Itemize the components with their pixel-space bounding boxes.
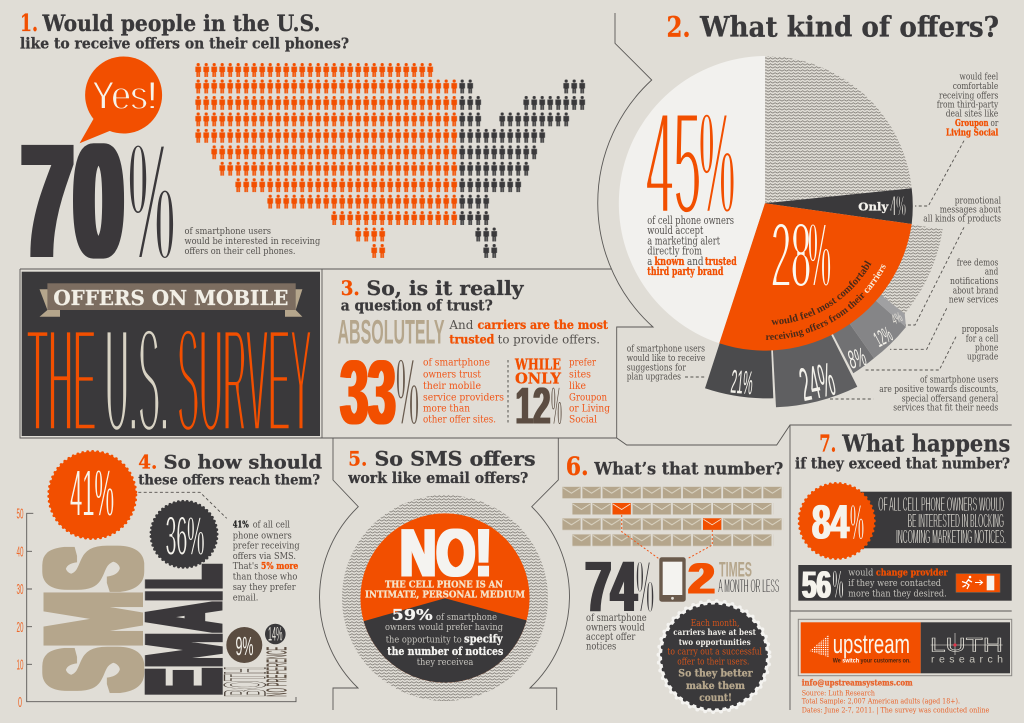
panel: section 1 heading: Would people in the U.S. — [42, 11, 320, 37]
text: 70 percent description — [184, 226, 320, 257]
text: proposals label — [962, 324, 999, 363]
text: section 4 description: phone owners — [233, 530, 292, 541]
stat: while only 12 percent: 12 — [516, 377, 550, 435]
text: 45 percent description: would accept — [647, 224, 704, 237]
text: A MONTH OR LESS — [718, 576, 779, 597]
heading: section 6: What’s that number? — [593, 459, 783, 479]
text: discounts label: of smartphone users — [920, 375, 998, 386]
text: promotional messages label — [923, 195, 1001, 225]
heading: section 2: 2. — [666, 11, 690, 44]
pie wedge: 8 percent — [765, 203, 874, 373]
badge: 84 percent: 84 — [812, 495, 849, 549]
text: absolutely statement: to provide offers. — [498, 332, 600, 346]
badge: 9 percent: 9% — [236, 631, 254, 661]
banner title: THE — [27, 295, 96, 464]
text: plan upgrades label: would like to receive — [627, 353, 706, 364]
text: 12 percent description: Social — [569, 413, 598, 425]
text: proposals label: proposals — [962, 324, 998, 335]
panel: 84 percent bar — [799, 484, 1012, 558]
badge: 41 percent — [49, 452, 136, 538]
stat: 2 times a month or less: 2 — [688, 554, 714, 603]
stat: 56 percent: 56 — [802, 565, 831, 607]
text: 12 percent description: sites — [569, 368, 591, 380]
heading: section 2: What kind of offers? — [699, 11, 999, 44]
dotted connectors to phone — [622, 515, 712, 558]
heading: section 5: 5. — [348, 448, 367, 471]
text: 12 percent description: prefer — [569, 357, 597, 369]
stat: 74 percent: 74 — [586, 548, 637, 627]
text: promotional messages label: promotional — [955, 195, 1001, 206]
heading: section 5: So SMS offers — [374, 448, 536, 471]
panel: survey title banner — [22, 272, 320, 464]
label: only 4 percent: Only — [858, 200, 889, 214]
panel: logos — [798, 619, 1012, 676]
text: 74 percent description — [586, 613, 647, 652]
chart: preferred channel bar chart: NO PREFERENCE — [262, 647, 294, 697]
stat: 28 percent: 28 — [771, 203, 811, 307]
panel: section 1 heading: 1. — [20, 10, 38, 37]
bar: SMS: SMS — [20, 546, 166, 692]
text: free demos label — [949, 258, 998, 306]
text: 33 percent description: their mobile — [423, 380, 481, 392]
chart: offers pie chart: % — [808, 203, 831, 307]
panel: 56 percent bar — [798, 562, 1012, 608]
text: 45 percent description — [647, 214, 737, 278]
text: discounts label — [879, 375, 998, 414]
text: % — [396, 337, 419, 446]
text: change provider: if they were contacted — [848, 578, 941, 589]
axis labels: 0 — [18, 694, 22, 711]
chart: preferred channel bar chart: 36% — [166, 504, 204, 567]
pie wedge: white 45 percent — [619, 56, 765, 343]
label: 8 percent: 8% — [845, 341, 869, 375]
subhead: INTIMATE, PERSONAL MEDIUM — [365, 589, 525, 600]
heading: section 4: these offers reach them? — [138, 472, 320, 488]
text: source credits: Total Sample: 2,007 American adults (aged 18+). — [802, 697, 960, 706]
text: section 4 description — [233, 520, 300, 604]
panel: section 1 heading — [20, 10, 349, 53]
stat: 2 times a month or less: TIMES — [719, 559, 752, 582]
chart: offers pie chart: 24% — [795, 352, 839, 411]
heading: section 7: 7. — [819, 431, 836, 458]
59 percent text: owners would prefer having — [385, 622, 503, 633]
text: absolutely statement: And — [448, 318, 474, 332]
text: change provider — [848, 568, 949, 599]
text: 33 percent description: more than — [423, 403, 470, 415]
heading: section 7: if they exceed that number? — [795, 455, 1010, 472]
pie wedge: small 4 percent — [765, 203, 906, 327]
text: free demos label: and — [985, 267, 998, 278]
stat: 45 percent — [646, 82, 735, 246]
ribbon — [40, 283, 302, 317]
leader line: 41 percent — [138, 492, 227, 518]
text: 45 percent description: known — [654, 255, 684, 268]
text: 74 percent description: of smartphone — [586, 613, 647, 624]
text: 70 percent description: would be interested in receiving — [184, 236, 320, 247]
text: source credits: Dates: June 2-7, 2011. | The survey was conducted online — [802, 705, 990, 714]
text: 45 percent description: trusted — [705, 255, 737, 268]
text: 12 percent description: or Living — [569, 403, 610, 415]
chart: preferred channel bar chart: 40 — [16, 544, 24, 560]
pie wedge: 21 percent — [705, 203, 773, 398]
text: absolutely statement: ABSOLUTELY — [338, 313, 445, 351]
heading: section 4: So how should — [164, 451, 322, 473]
chart: preferred channel bar chart: BOTH — [213, 667, 278, 697]
text: discounts label: services that fit their needs — [893, 403, 998, 414]
logo: Luth Research — [921, 622, 1010, 673]
chart: preferred channel bar chart: 30 — [16, 581, 24, 598]
chart: preferred channel bar chart: 10 — [16, 656, 24, 674]
text: absolutely statement: carriers are the most — [478, 318, 608, 332]
text: 74 percent description: accept offer — [586, 632, 635, 643]
text: 33 percent description: service providers — [423, 391, 504, 403]
panel: section 1 heading: like to receive offers on their cell phones? — [20, 36, 349, 53]
callout: Yes speech bubble — [80, 56, 162, 143]
59 percent text — [385, 606, 503, 668]
text: 45 percent description: third party brand — [647, 265, 724, 278]
text: absolutely statement: trusted — [449, 332, 495, 346]
pie wedge: 12 percent — [765, 203, 906, 358]
pie wedge: orange 28 percent — [719, 203, 912, 351]
text: discounts label: special offersand general — [902, 394, 998, 405]
subhead — [365, 580, 525, 600]
label: small 4 percent: 4% — [889, 309, 905, 327]
panel: NO circle — [342, 495, 548, 701]
59 percent text: of smartphone — [436, 612, 497, 623]
stat: 28 percent — [771, 203, 831, 307]
text: blocking notices — [878, 494, 1006, 548]
text: section 4 description: offers via SMS. — [233, 551, 296, 562]
chart: preferred channel bar chart — [16, 452, 296, 711]
text: third-party deal sites label: receiving offers — [939, 90, 998, 101]
text: 33 percent description: owners trust — [423, 368, 482, 380]
text: change provider: would — [848, 568, 873, 579]
chart: offers pie chart — [618, 56, 943, 411]
stat: while only 12 percent: WHILE — [514, 355, 561, 373]
text: third-party deal sites label: Groupon — [955, 118, 989, 129]
stat: 70 percent — [22, 106, 175, 298]
text: change provider: change provider — [876, 568, 949, 579]
text: 45 percent description: a marketing alert — [647, 234, 720, 247]
text: % — [128, 106, 175, 298]
logo: upstream — [801, 622, 921, 673]
dark lower area — [364, 598, 526, 683]
heading: section 3 — [341, 276, 525, 315]
text: promotional messages label: all kinds of products — [923, 214, 1001, 225]
text: proposals label: upgrade — [967, 352, 999, 363]
heading: section 6: 6. — [566, 452, 589, 481]
callout: carriers scalloped circle: offer to their users. — [677, 656, 749, 667]
text: 33 percent description: of smartphone — [423, 357, 490, 369]
text: third-party deal sites label: would feel — [960, 71, 998, 82]
text: section 4 description: say they prefer — [233, 582, 296, 593]
label: only 4 percent — [858, 190, 906, 223]
text: 45 percent description: and — [687, 255, 704, 268]
text: % — [636, 545, 654, 630]
text: third-party deal sites label: or — [990, 118, 999, 129]
pie wedge: 24 percent — [765, 203, 857, 407]
icon: phone — [659, 557, 686, 602]
logo: upstream: We switch your customers on. — [833, 657, 911, 664]
text: 45 percent description: a — [647, 255, 653, 268]
text: 12 percent description: Groupon — [569, 391, 607, 403]
text: section 4 description: of all cell — [253, 520, 290, 531]
logo: Luth Research: research — [931, 653, 1003, 665]
text: free demos label: notifications — [950, 276, 998, 287]
chart: US map of people pictograms — [194, 63, 586, 259]
axis labels — [16, 506, 24, 711]
text: section 4 description: than those who — [233, 571, 298, 582]
text: free demos label: about brand — [953, 285, 998, 296]
heading: section 5: work like email offers? — [347, 470, 528, 487]
text: 33 percent description — [423, 357, 504, 425]
callout: carriers scalloped circle: count! — [699, 692, 732, 704]
chart: offers pie chart: % — [699, 82, 735, 246]
text: proposals label: phone — [975, 343, 999, 354]
heading: section 3: 3. — [341, 276, 360, 300]
text: plan upgrades label: suggestions for — [627, 362, 686, 373]
callout: carriers scalloped circle: two opportunities — [679, 638, 751, 648]
text: source credits: Source: Luth Research — [802, 688, 875, 697]
stat: while only 12 percent — [514, 355, 562, 436]
text: promotional messages label: messages about — [940, 205, 1001, 216]
callout: carriers scalloped circle — [658, 601, 770, 712]
chart: preferred channel bar chart: 20 — [16, 619, 24, 636]
NO headline: NO! — [400, 516, 492, 590]
text: source credits: info@upstreamsystems.com — [802, 679, 913, 689]
callout: carriers scalloped circle: Each month, — [691, 618, 739, 629]
orange disc — [360, 513, 530, 683]
text: SURVEY — [177, 295, 312, 464]
text: curved carriers description: receiving offers from their carriers — [766, 264, 886, 340]
text: section 4 description: prefer receiving — [233, 540, 300, 551]
logo: Luth Research: LUTH — [930, 635, 1003, 657]
text: free demos label: free demos — [957, 258, 998, 269]
heading: section 3: a question of trust? — [341, 298, 493, 315]
callout: carriers scalloped circle: make them — [686, 680, 745, 692]
heading: section 4: 4. — [138, 451, 157, 473]
text: section 4 description: 5% more — [261, 561, 298, 572]
59 percent text: the number of notices — [387, 645, 503, 658]
text: third-party deal sites label: Living Social — [946, 127, 999, 138]
orange envelope — [703, 518, 721, 530]
stat: 70 percent: 0 — [75, 111, 123, 290]
chart: offers pie chart: 4% — [890, 190, 906, 223]
text: 45 percent description: of cell phone owners — [647, 214, 734, 227]
59 percent text: they receivea — [417, 657, 474, 668]
stat: 70 percent: 7 — [22, 111, 72, 290]
panel: 56 percent bar: % — [832, 562, 844, 608]
59 percent text: specify — [464, 632, 503, 645]
text: third-party deal sites label: comfortable — [953, 81, 999, 92]
heading: section 4 — [138, 451, 322, 488]
stat: 2 times a month or less — [688, 554, 779, 603]
label: 12 percent: 12% — [870, 322, 896, 352]
callout: carriers scalloped circle: carriers have at best — [673, 628, 756, 638]
banner subtitle: OFFERS ON MOBILE — [53, 286, 288, 310]
zigzag ring — [342, 495, 548, 701]
text: 33 percent description: other offer sites. — [423, 413, 496, 425]
chart: preferred channel bar chart: 41% — [70, 456, 114, 531]
callout: carriers scalloped circle: So they better — [678, 668, 753, 680]
chart: envelopes grid — [562, 487, 783, 546]
pie wedge: dark only 4 percent — [765, 188, 913, 224]
text: plan upgrades label — [627, 344, 706, 383]
text: section 4 description: 41% — [233, 520, 249, 531]
59 percent text: the opportunity to — [386, 634, 462, 645]
callout: Yes speech bubble: Yes! — [92, 74, 157, 118]
chart: preferred channel bar chart: 14% — [268, 625, 283, 646]
pie wedge: zigzag outer — [765, 203, 943, 314]
text: 74 percent description: owners would — [586, 623, 645, 634]
pie wedge: zigzag third-party — [765, 56, 912, 203]
heading: section 7: What happens — [841, 431, 1010, 458]
text: section 4 description: That's — [233, 561, 258, 572]
stat: 33 percent: 33 — [340, 342, 396, 443]
text: plan upgrades label: of smartphone users — [627, 344, 705, 355]
heading: section 6 — [566, 452, 783, 481]
chart: preferred channel bar chart: 50 — [16, 506, 24, 522]
text: third-party deal sites label: deal sites like — [946, 109, 999, 120]
text: % — [551, 374, 562, 436]
text: change provider: more than they desired. — [848, 588, 947, 599]
heading: section 7 — [795, 431, 1010, 472]
text: free demos label: new services — [949, 295, 998, 306]
axes — [27, 513, 296, 702]
orange envelope — [612, 503, 631, 514]
badge: 9 percent — [226, 627, 262, 663]
icon: exit sign — [956, 574, 1000, 592]
heading: section 3: So, is it really — [366, 276, 525, 300]
text: proposals label: for a cell — [966, 333, 998, 344]
text: 70 percent description: of smartphone users — [184, 226, 271, 237]
text: 12 percent description: like — [569, 380, 586, 392]
text: plan upgrades label: plan upgrades — [627, 372, 681, 383]
text: source credits — [802, 679, 990, 714]
59 percent text: 59% — [392, 606, 433, 624]
badge: 36 percent — [151, 501, 217, 567]
chart: preferred channel bar chart: EMAIL — [129, 564, 239, 696]
stat: while only 12 percent: ONLY — [515, 369, 561, 387]
logo: upstream: upstream — [833, 629, 910, 659]
text: 12 percent description — [569, 357, 610, 425]
subhead: THE CELL PHONE IS AN — [385, 580, 503, 591]
callout: carriers scalloped circle: to carry out a successful — [667, 646, 762, 657]
text: 70 percent description: offers on their cell phones. — [184, 246, 296, 257]
chart: offers pie chart: 21% — [729, 363, 755, 401]
heading: section 5 — [347, 448, 536, 487]
badge: 84 percent: % — [850, 493, 864, 550]
stat: 45 percent: 45 — [646, 82, 701, 246]
text: third-party deal sites label — [937, 71, 999, 138]
text: section 4 description: email. — [233, 593, 258, 604]
text: 45 percent description: directly from — [647, 245, 702, 258]
banner title: U.S. — [105, 295, 169, 464]
leader lines: pie labels — [685, 141, 964, 399]
badge: 14 percent — [265, 624, 286, 646]
text: curved carriers description: would feel most comfortable — [771, 260, 872, 325]
badge: 84 percent — [799, 484, 874, 558]
text: 74 percent description: notices — [586, 641, 616, 652]
text: third-party deal sites label: from third-party — [937, 100, 999, 111]
